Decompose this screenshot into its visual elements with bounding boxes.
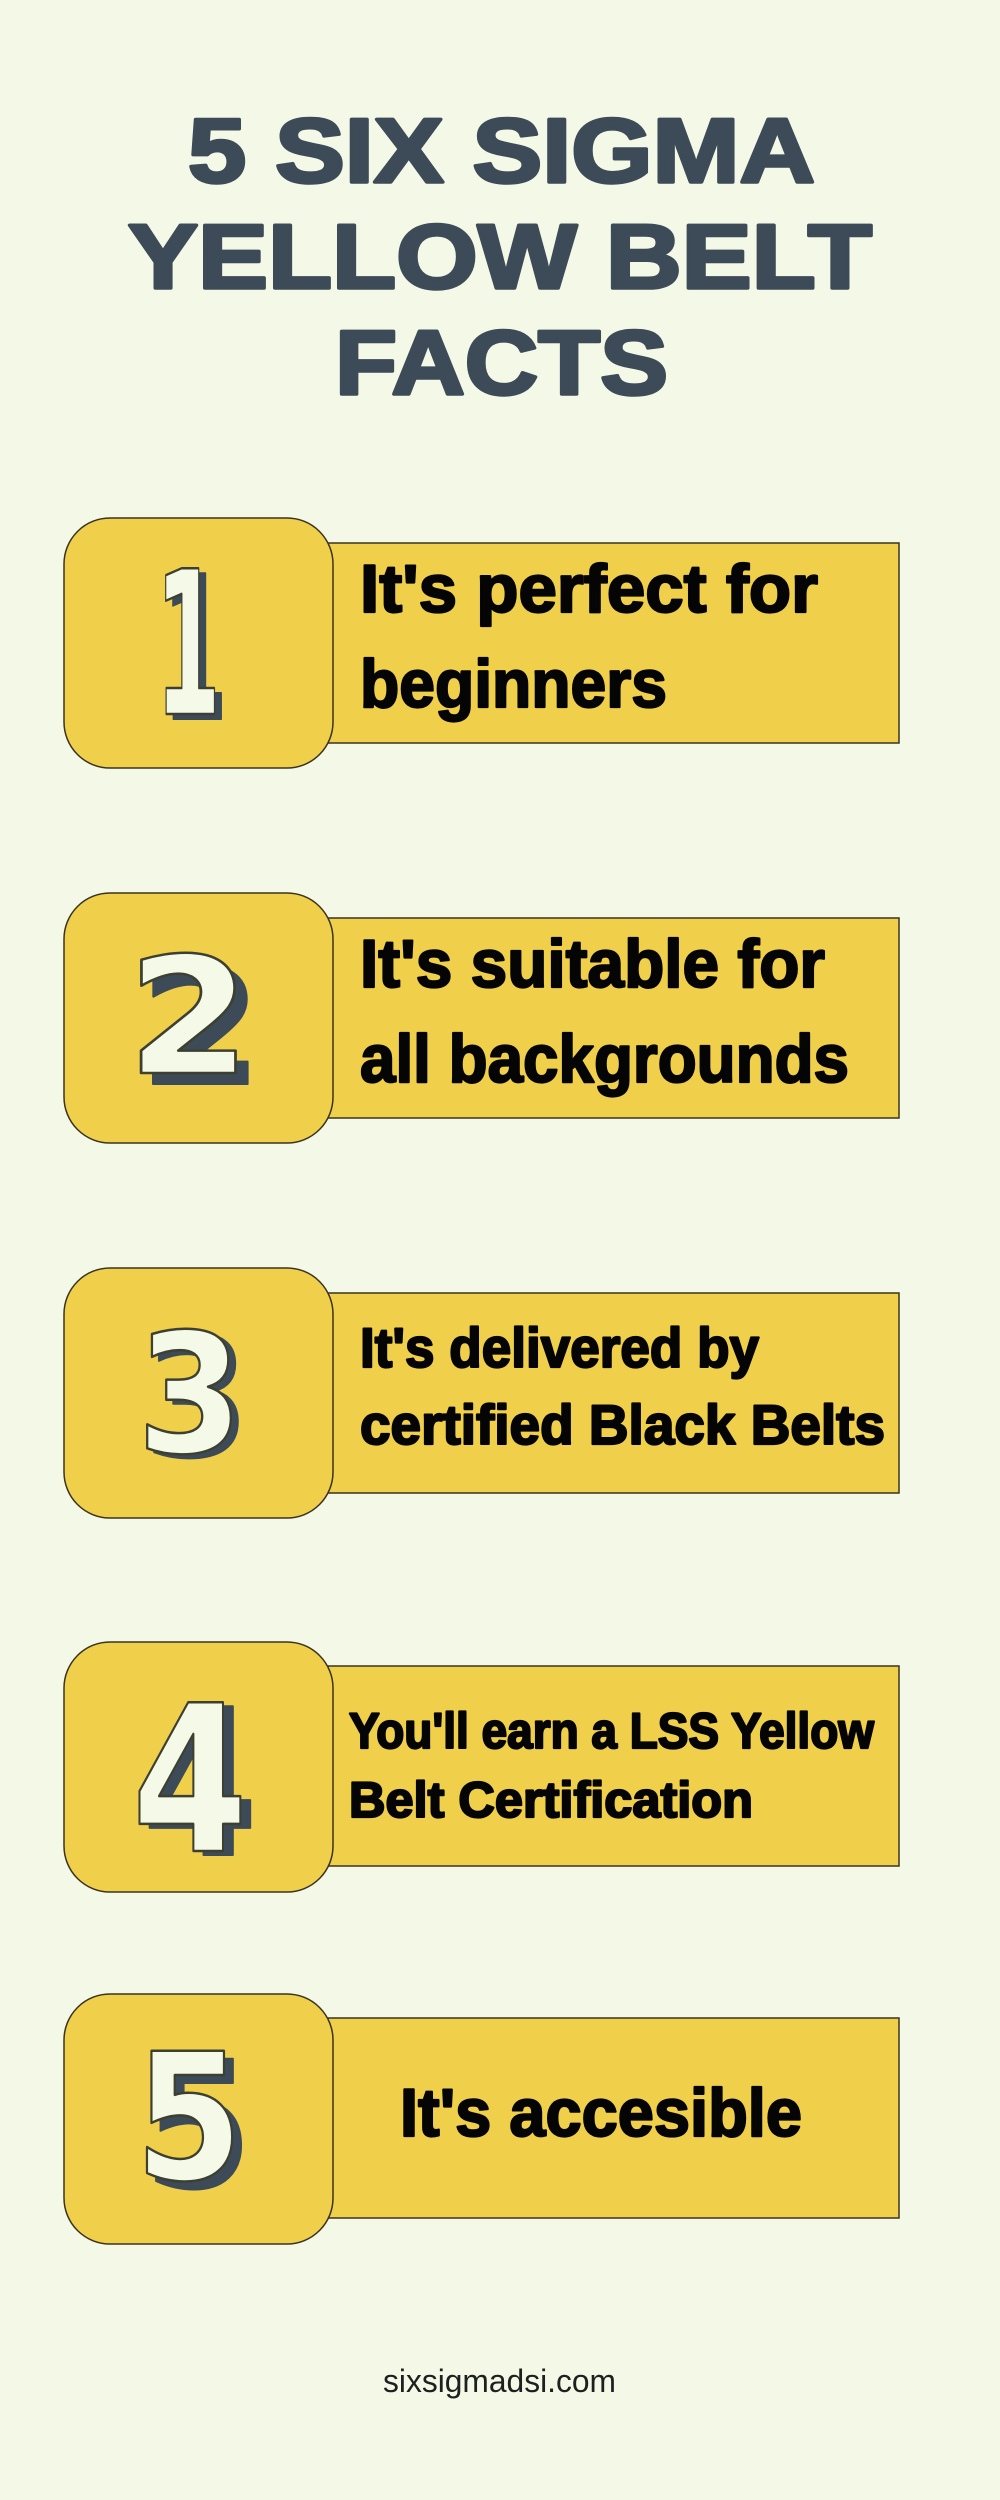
- panel: fact 2: [64, 893, 899, 1143]
- fact 4 text: You'll earn a LSS Yellow: [349, 1703, 874, 1759]
- icon: numeral 5: 5: [135, 2016, 243, 2221]
- icon: numeral 1: 1: [155, 529, 221, 762]
- title: [128, 101, 872, 414]
- number tile 5: [64, 1994, 333, 2244]
- title: 5 SIX SIGMA: [188, 101, 815, 202]
- fact 4 text: [349, 1703, 874, 1828]
- number tile 2: [64, 893, 333, 1143]
- title: FACTS: [335, 313, 668, 414]
- text bar 1: [328, 543, 899, 743]
- text bar 4: [328, 1666, 899, 1866]
- fact 2 text: It's suitable for: [360, 926, 825, 1002]
- icon: numeral 5: 5: [144, 2024, 252, 2229]
- number tile 3: [64, 1268, 333, 1518]
- fact 3 text: certified Black Belts: [360, 1393, 885, 1456]
- fact 4 text: Belt Certification: [349, 1772, 753, 1828]
- icon: numeral 2: 2: [127, 924, 251, 1112]
- footer website: sixsigmadsi.com: [383, 2363, 616, 2399]
- fact 1 text: beginners: [360, 646, 667, 722]
- icon: numeral 1: [155, 529, 228, 767]
- icon: numeral 3: 3: [144, 1303, 250, 1496]
- fact 2 text: all backgrounds: [360, 1021, 849, 1097]
- icon: numeral 4: 4: [132, 1663, 248, 1900]
- fact 1 text: It's perfect for: [360, 551, 818, 627]
- number tile 1: [64, 518, 333, 768]
- panel: fact 3: [64, 1268, 899, 1518]
- panel: fact 1: 1: [162, 534, 228, 767]
- fact 1 text: [360, 551, 818, 722]
- icon: numeral 3: 3: [137, 1299, 243, 1492]
- icon: numeral 4: 4: [142, 1667, 258, 1904]
- title: YELLOW BELT: [128, 207, 872, 308]
- fact 5 text: It's accesible: [400, 2075, 802, 2151]
- panel: fact 5: [64, 1994, 899, 2244]
- icon: numeral 2: 2: [139, 935, 263, 1123]
- fact 3 text: It's delivered by: [360, 1316, 759, 1379]
- panel: fact 4: [64, 1642, 899, 1904]
- text bar 3: [328, 1293, 899, 1493]
- number tile 4: [64, 1642, 333, 1892]
- text bar 2: [328, 918, 899, 1118]
- text bar 5: [328, 2018, 899, 2218]
- fact 3 text: [360, 1316, 885, 1456]
- panel: fact 1: [64, 518, 899, 768]
- fact 2 text: [360, 926, 849, 1097]
